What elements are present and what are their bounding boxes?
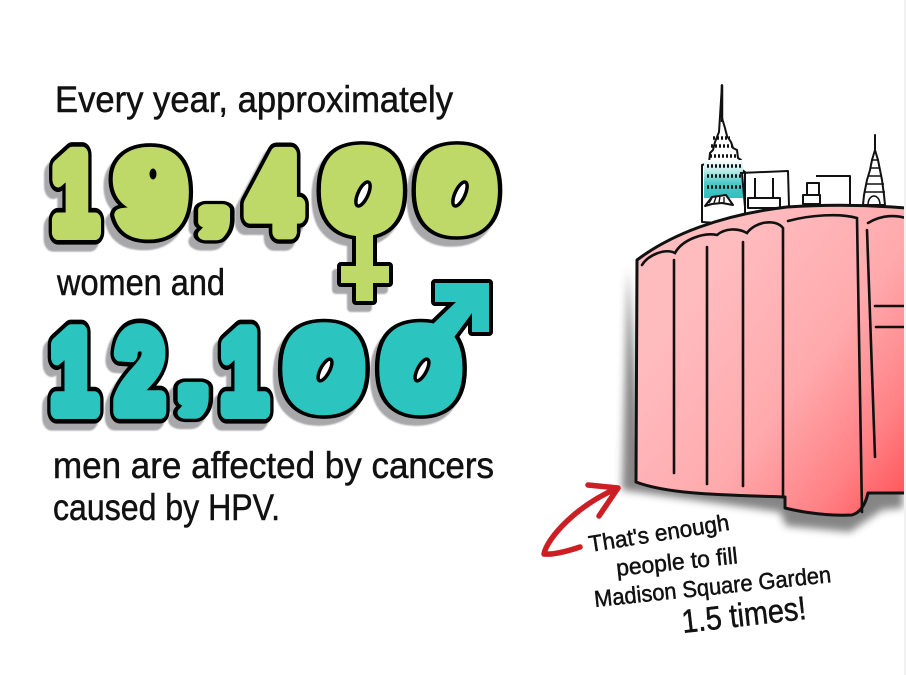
callout: Madison Square Garden 1.5 times: That's enough bbox=[587, 509, 731, 557]
number fill: , bbox=[178, 327, 208, 418]
number shadow: 0 bbox=[413, 134, 491, 260]
number outline: 4 bbox=[248, 130, 300, 256]
callout: Madison Square Garden 1.5 times: people to fill bbox=[615, 542, 739, 581]
number shadow: 1 bbox=[216, 316, 262, 443]
digit counters bbox=[150, 168, 470, 208]
number outline: 1 bbox=[53, 131, 97, 256]
number shadow: , bbox=[173, 334, 203, 425]
number outline: 9 bbox=[116, 132, 186, 256]
number fill: 4 bbox=[248, 130, 300, 256]
number fill: , bbox=[198, 149, 230, 239]
number shadow: 1 bbox=[48, 138, 92, 263]
closing text: men are affected bbox=[53, 445, 494, 528]
big number: 12,100 with male symbol bbox=[46, 283, 489, 443]
number fill: 0 bbox=[323, 127, 401, 253]
closing text: men are affected: men are affected by cancers bbox=[53, 445, 494, 486]
low-rise buildings bbox=[740, 171, 789, 208]
number fill: 1 bbox=[53, 131, 97, 256]
number fill: 0 bbox=[284, 306, 364, 433]
number outline: 0 bbox=[418, 127, 496, 253]
number fill: 0 bbox=[381, 306, 461, 433]
arena panels and ribs bbox=[642, 215, 906, 512]
number shadow: , bbox=[193, 156, 225, 246]
number fill bbox=[53, 127, 496, 301]
red arrow bbox=[544, 485, 618, 554]
number shadow: 1 bbox=[46, 316, 92, 443]
closing text: men are affected: caused by HPV. bbox=[53, 487, 280, 528]
number outline bbox=[51, 283, 489, 436]
number shadow: 0 bbox=[279, 313, 359, 440]
number shadow: 9 bbox=[111, 139, 181, 263]
number outline: 0 bbox=[323, 127, 401, 253]
number fill: 1 bbox=[51, 309, 97, 436]
number shadow: 0 bbox=[318, 134, 396, 260]
arena body bbox=[636, 205, 906, 515]
number shadow: 0 bbox=[376, 313, 456, 440]
number shadow: 4 bbox=[243, 137, 295, 263]
building shadow bbox=[622, 268, 903, 532]
right edge strip bbox=[904, 0, 906, 675]
number shadow: 2 bbox=[111, 316, 159, 443]
number fill: 9 bbox=[116, 132, 186, 256]
label: women and: women and bbox=[56, 262, 225, 303]
number outline: 1 bbox=[221, 309, 267, 436]
number outline: , bbox=[178, 327, 208, 418]
intro text: every year: Every year, approximately bbox=[55, 79, 453, 120]
skyscraper left bbox=[702, 85, 745, 225]
callout: Madison Square Garden 1.5 times bbox=[587, 509, 832, 640]
spire right bbox=[863, 135, 885, 205]
illustration: Madison Square Garden bbox=[622, 85, 906, 532]
callout: Madison Square Garden 1.5 times: Madison Square Garden bbox=[593, 561, 832, 612]
big number: 19,400 with female symbol bbox=[48, 127, 496, 308]
number shadow bbox=[46, 313, 456, 443]
number outline: 0 bbox=[284, 306, 364, 433]
number outline bbox=[53, 127, 496, 301]
number fill: 0 bbox=[418, 127, 496, 253]
number shadow bbox=[48, 134, 491, 308]
number fill bbox=[51, 283, 489, 436]
number outline: 1 bbox=[51, 309, 97, 436]
number fill: 2 bbox=[116, 309, 164, 436]
skyline bbox=[702, 85, 885, 225]
number outline: , bbox=[198, 149, 230, 239]
number outline: 0 bbox=[381, 306, 461, 433]
number outline: 2 bbox=[116, 309, 164, 436]
callout: Madison Square Garden 1.5 times: 1.5 times! bbox=[680, 589, 808, 640]
digit counters bbox=[315, 357, 432, 383]
number fill: 1 bbox=[221, 309, 267, 436]
